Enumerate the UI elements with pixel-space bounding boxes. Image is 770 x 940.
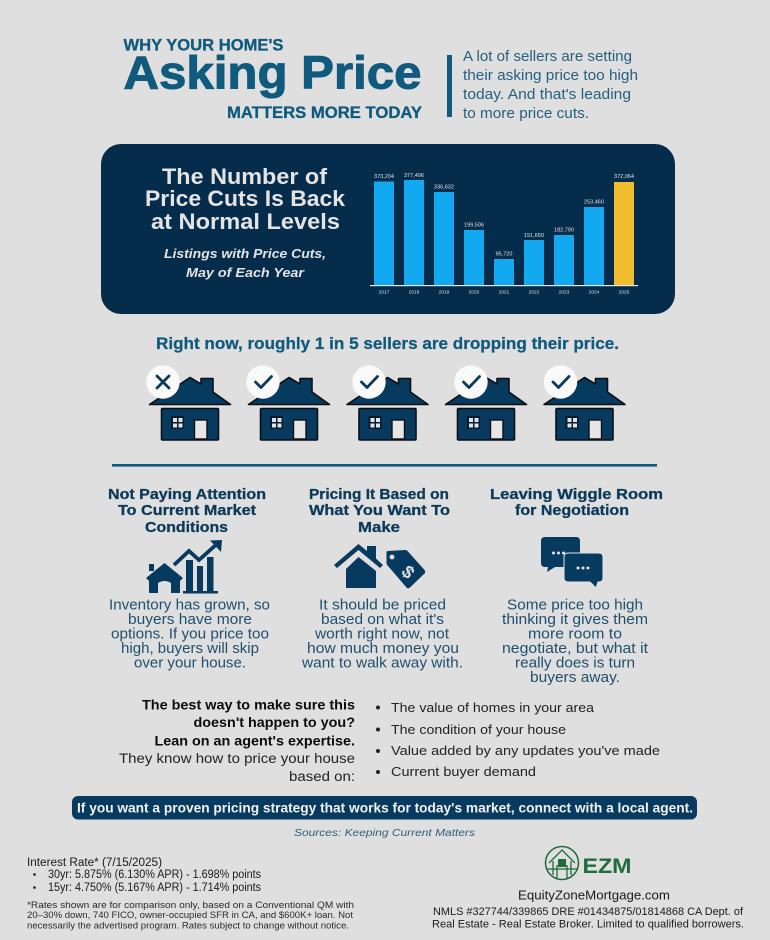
column heading: Leaving Wiggle Room <box>490 486 663 503</box>
bar chart: 182,790 <box>554 228 574 234</box>
panel: price cuts chart <box>101 144 675 314</box>
column text: over your house. <box>134 656 246 672</box>
bar chart: 2019 <box>439 290 450 296</box>
column: market conditions <box>108 486 270 672</box>
sources: Sources: Keeping Current Matters <box>294 827 476 839</box>
rate disclaimer: necessarily the advertised program. Rates subject to change without notice. <box>27 920 349 930</box>
rate disclaimer <box>27 900 354 930</box>
panel heading: at Normal Levels <box>151 209 340 234</box>
panel heading: The Number of <box>162 164 328 189</box>
bar chart: 336,632 <box>434 184 454 190</box>
bar chart: 2018 <box>409 290 420 296</box>
column text: based on what it's <box>321 612 444 628</box>
bar chart <box>370 173 638 296</box>
column text: high, buyers will skip <box>121 641 259 657</box>
intro text <box>463 49 638 122</box>
bar chart: 199,506 <box>464 222 484 228</box>
bullet list: Current buyer demand <box>391 764 536 779</box>
column text: thinking it gives them <box>502 612 648 628</box>
bar chart: 377,496 <box>404 173 424 179</box>
call to action: If you want a proven pricing strategy that works for today's market, connect with a local agent. <box>77 800 693 816</box>
column heading: Not Paying Attention <box>108 486 266 503</box>
house 1 with cross <box>146 365 230 440</box>
bar chart: 373,204 <box>374 174 394 180</box>
title: Asking Price <box>124 46 422 98</box>
agent expertise text <box>119 698 355 784</box>
column: pricing <box>301 486 463 672</box>
panel heading: Price Cuts Is Back <box>145 186 345 211</box>
house 4 with check <box>446 365 526 440</box>
house 5 with check <box>544 365 625 440</box>
icon: house and price tag <box>334 544 425 588</box>
column heading <box>309 486 450 536</box>
column text: want to walk away with. <box>301 656 463 672</box>
intro text: A lot of sellers are setting <box>463 49 632 65</box>
panel subtitle: May of Each Year <box>186 265 305 280</box>
agent expertise text: They know how to price your house <box>119 751 355 766</box>
agent expertise text: based on: <box>289 769 355 784</box>
column text: negotiate, but what it <box>502 641 648 657</box>
agent expertise text: The best way to make sure this <box>142 698 355 712</box>
one in five heading: Right now, roughly 1 in 5 sellers are dropping their price. <box>156 335 619 353</box>
column text: It should be priced <box>319 598 446 614</box>
column text: Some price too high <box>507 598 643 614</box>
column text <box>502 598 648 686</box>
bullet list <box>376 700 660 779</box>
icon: house and price tag: $ <box>397 561 419 583</box>
bar chart: 2025 <box>619 290 630 296</box>
title divider bar <box>447 55 452 117</box>
panel heading <box>145 164 345 234</box>
bar chart: 2024 <box>589 290 600 296</box>
title: WHY YOUR HOME'S <box>124 36 284 54</box>
interest rates <box>27 857 261 894</box>
bar chart: 151,650 <box>524 233 544 239</box>
bar chart: 2021 <box>499 290 510 296</box>
logo: EZM: EZM <box>582 855 632 878</box>
icon: house and rising chart <box>146 540 222 594</box>
column heading <box>108 486 266 536</box>
column: negotiation <box>490 486 663 686</box>
intro text: their asking price too high <box>463 68 638 84</box>
agent expertise text: Lean on an agent's expertise. <box>154 734 355 748</box>
logo: EZM <box>546 846 632 880</box>
column text: really does is turn <box>515 656 635 672</box>
column text: how much money you <box>307 641 459 657</box>
column text <box>301 598 463 672</box>
interest rates: 15yr: 4.750% (5.167% APR) - 1.714% points <box>48 882 261 894</box>
column text: buyers have more <box>128 612 252 628</box>
bar chart: 372,064 <box>614 174 634 180</box>
column text <box>109 598 270 672</box>
column heading: To Current Market <box>118 502 256 519</box>
column heading: for Negotiation <box>515 502 629 519</box>
column text: worth right now, not <box>314 626 449 642</box>
licensing text: Real Estate - Real Estate Broker. Limited to qualified borrowers. <box>432 918 744 930</box>
bullet list: The value of homes in your area <box>391 700 595 715</box>
panel subtitle <box>164 246 326 280</box>
bullet list: Value added by any updates you've made <box>391 743 660 758</box>
call to action <box>72 796 697 820</box>
column heading <box>490 486 663 519</box>
licensing text: NMLS #327744/339865 DRE #01434875/01814868 CA Dept. of <box>433 906 744 918</box>
panel subtitle: Listings with Price Cuts, <box>164 246 326 261</box>
bar chart: 2017 <box>379 290 390 296</box>
bar chart: 2022 <box>529 290 540 296</box>
bar chart: 95,720 <box>496 252 512 258</box>
house row <box>146 365 625 440</box>
house 3 with check <box>347 365 428 440</box>
column text: buyers away. <box>530 670 620 686</box>
column heading: Conditions <box>145 519 228 536</box>
interest rates: 30yr: 5.875% (6.130% APR) - 1.698% points <box>48 869 261 881</box>
column text: more room to <box>528 626 622 642</box>
bullet list: The condition of your house <box>391 722 566 737</box>
column text: options. If you price too <box>111 626 269 642</box>
interest rates: Interest Rate* (7/15/2025) <box>27 857 162 869</box>
bar chart: 253,460 <box>584 200 604 206</box>
rate disclaimer: 20–30% down, 740 FICO, owner-occupied SFR in CA, and $600K+ loan. Not <box>27 910 353 920</box>
website: EquityZoneMortgage.com <box>518 888 670 902</box>
bar chart: 2023 <box>559 290 570 296</box>
icon: chat bubbles <box>541 537 603 588</box>
column heading: Make <box>358 519 400 536</box>
house 2 with check <box>246 365 330 440</box>
title <box>124 36 422 122</box>
title: MATTERS MORE TODAY <box>227 104 422 122</box>
column text: Inventory has grown, so <box>109 598 270 614</box>
rate disclaimer: *Rates shown are for comparison only, based on a Conventional QM with <box>27 900 354 910</box>
column heading: What You Want To <box>309 502 450 519</box>
intro text: today. And that's leading <box>463 87 631 103</box>
intro text: to more price cuts. <box>463 106 589 122</box>
licensing text <box>432 906 744 930</box>
column heading: Pricing It Based on <box>309 486 449 503</box>
bar chart: 2020 <box>469 290 480 296</box>
agent expertise text: doesn't happen to you? <box>194 715 355 730</box>
